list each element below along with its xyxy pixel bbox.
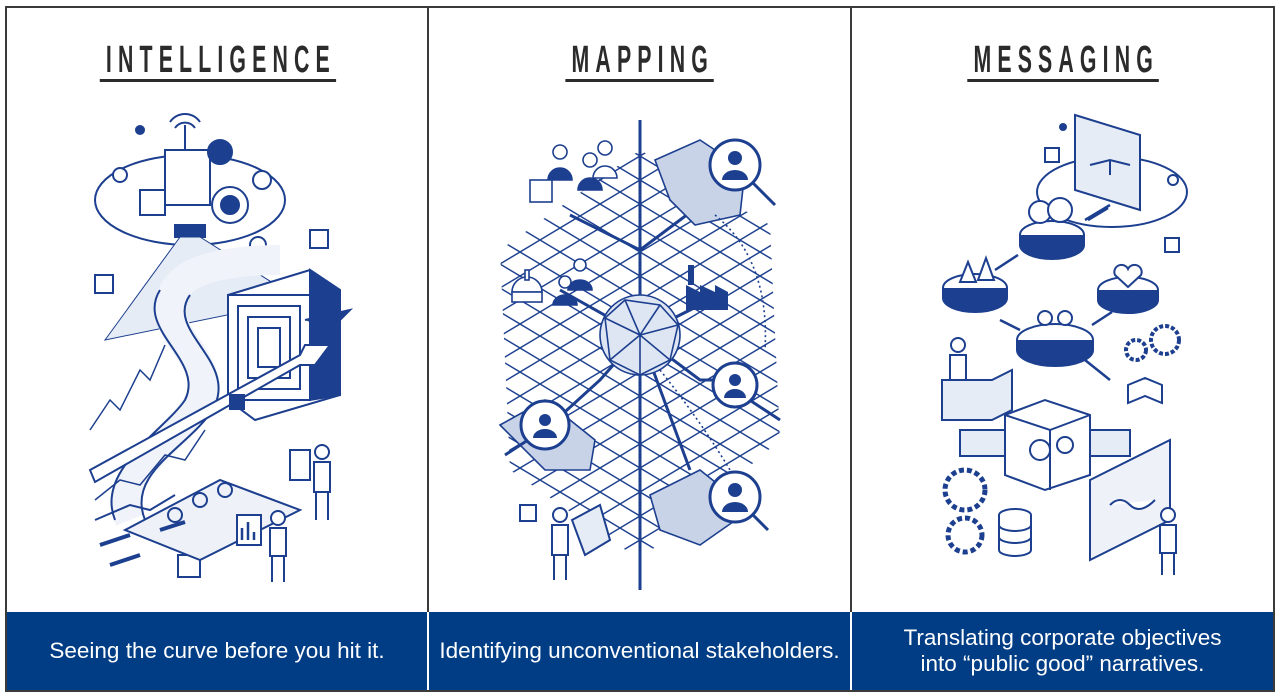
- icon: magnifiers: [505, 140, 780, 530]
- panel: messaging: [941, 39, 1188, 575]
- chart lines: [90, 345, 165, 430]
- illustration: intelligence: [88, 113, 353, 582]
- arrow: main: [90, 310, 350, 482]
- panel: intelligence: [88, 39, 353, 582]
- arrows: [995, 205, 1112, 380]
- platform: [125, 480, 300, 560]
- illustration: mapping: [498, 120, 781, 590]
- icon: factory: [686, 265, 728, 310]
- icon: satellite camera: [95, 114, 285, 253]
- light cone: [105, 237, 300, 340]
- icon: icosahedron: [600, 295, 680, 375]
- podium person: [942, 338, 1012, 420]
- person: at terminal: [520, 505, 610, 580]
- orbit and screen: [1037, 115, 1187, 252]
- road curve: [126, 260, 280, 520]
- iso grid: [500, 150, 780, 560]
- network lines: [545, 120, 735, 590]
- screen and person: [1090, 440, 1176, 575]
- illustration: messaging: [941, 114, 1188, 575]
- caption band: messaging: Translating corporate objectives: [903, 625, 1222, 650]
- caption band: messaging: into “public good” narratives.: [921, 651, 1204, 676]
- icon: people: [530, 141, 617, 305]
- heading: mapping: MAPPING: [571, 39, 714, 81]
- caption band: intelligence: Seeing the curve before you hit it.: [49, 638, 385, 663]
- platforms: [943, 221, 1158, 366]
- person: analyst right: [290, 445, 330, 520]
- dotted links: [660, 215, 765, 470]
- heading: messaging: MESSAGING: [974, 39, 1159, 81]
- icon: capitol: [512, 270, 542, 302]
- icon: gears: [1126, 326, 1179, 403]
- caption band: mapping: [429, 612, 850, 690]
- heading: intelligence: INTELLIGENCE: [106, 39, 336, 81]
- icon: trees: [960, 198, 1142, 325]
- icon: cubes: [95, 230, 328, 577]
- caption band: mapping: Identifying unconventional stakeholders.: [439, 638, 840, 663]
- icon: gears money: [945, 470, 985, 552]
- caption band: intelligence: [7, 612, 427, 690]
- icon: spiral box: [228, 270, 340, 420]
- pipe and cube: [960, 400, 1130, 490]
- terrain tiles: [500, 140, 750, 545]
- person: bottom: [237, 511, 286, 582]
- small arrows: [100, 522, 185, 565]
- panel: mapping: [498, 39, 781, 590]
- caption band: messaging: [852, 612, 1273, 690]
